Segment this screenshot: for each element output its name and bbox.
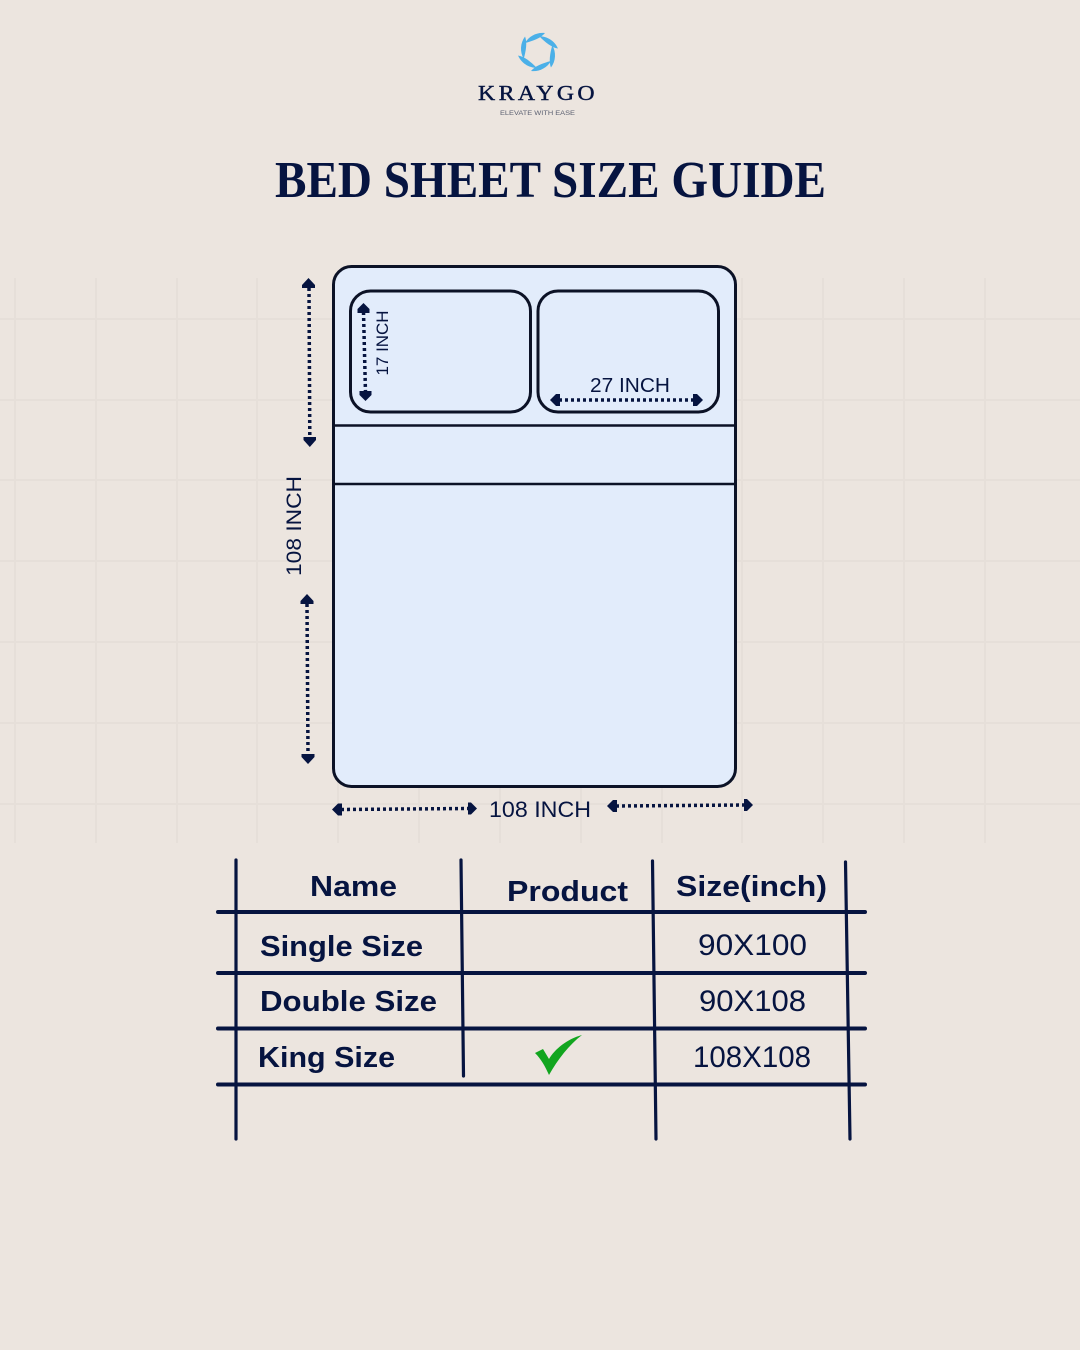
label: pillow width: 27 INCH — [590, 375, 670, 397]
arrow: bed width left — [332, 802, 477, 816]
row: double size: 90X108 — [699, 985, 806, 1018]
arrow: pillow height — [358, 303, 372, 401]
size table — [218, 860, 865, 1139]
row: single size: 90X100 — [698, 929, 807, 962]
icon: green check mark — [535, 1035, 582, 1075]
label: bed width: 108 INCH — [489, 797, 591, 822]
right pillow — [538, 291, 718, 412]
arrow: bed width right — [607, 799, 753, 812]
row: king size: King Size — [258, 1042, 395, 1074]
row: king size: 108X108 — [693, 1041, 811, 1074]
table grid lines — [218, 860, 865, 1139]
logo wordmark: KRAYGO — [478, 81, 598, 105]
arrow: pillow width — [550, 394, 703, 406]
sheet fold band — [334, 426, 735, 484]
row: single size: Single Size — [260, 931, 423, 963]
icon: logo ring of leaves — [515, 31, 561, 73]
title: BED SHEET SIZE GUIDE — [275, 152, 826, 209]
logo — [478, 31, 598, 117]
row: single size — [260, 929, 807, 963]
diagram: bed — [334, 266, 736, 786]
arrow: lower height — [300, 594, 314, 764]
bed outline — [334, 266, 736, 786]
logo tagline: ELEVATE WITH EASE — [500, 110, 576, 117]
row: double size: Double Size — [260, 986, 437, 1018]
row: king size — [258, 1035, 811, 1075]
left pillow — [350, 291, 530, 412]
label: pillow height: 17 INCH — [373, 310, 392, 376]
header row: Product — [507, 876, 628, 908]
header row: Size(inch) — [676, 871, 827, 903]
row: double size — [260, 985, 806, 1018]
header row: Name — [310, 871, 397, 903]
header row — [310, 871, 827, 908]
arrow: upper height — [302, 278, 316, 447]
label: bed height: 108 INCH — [283, 476, 306, 576]
